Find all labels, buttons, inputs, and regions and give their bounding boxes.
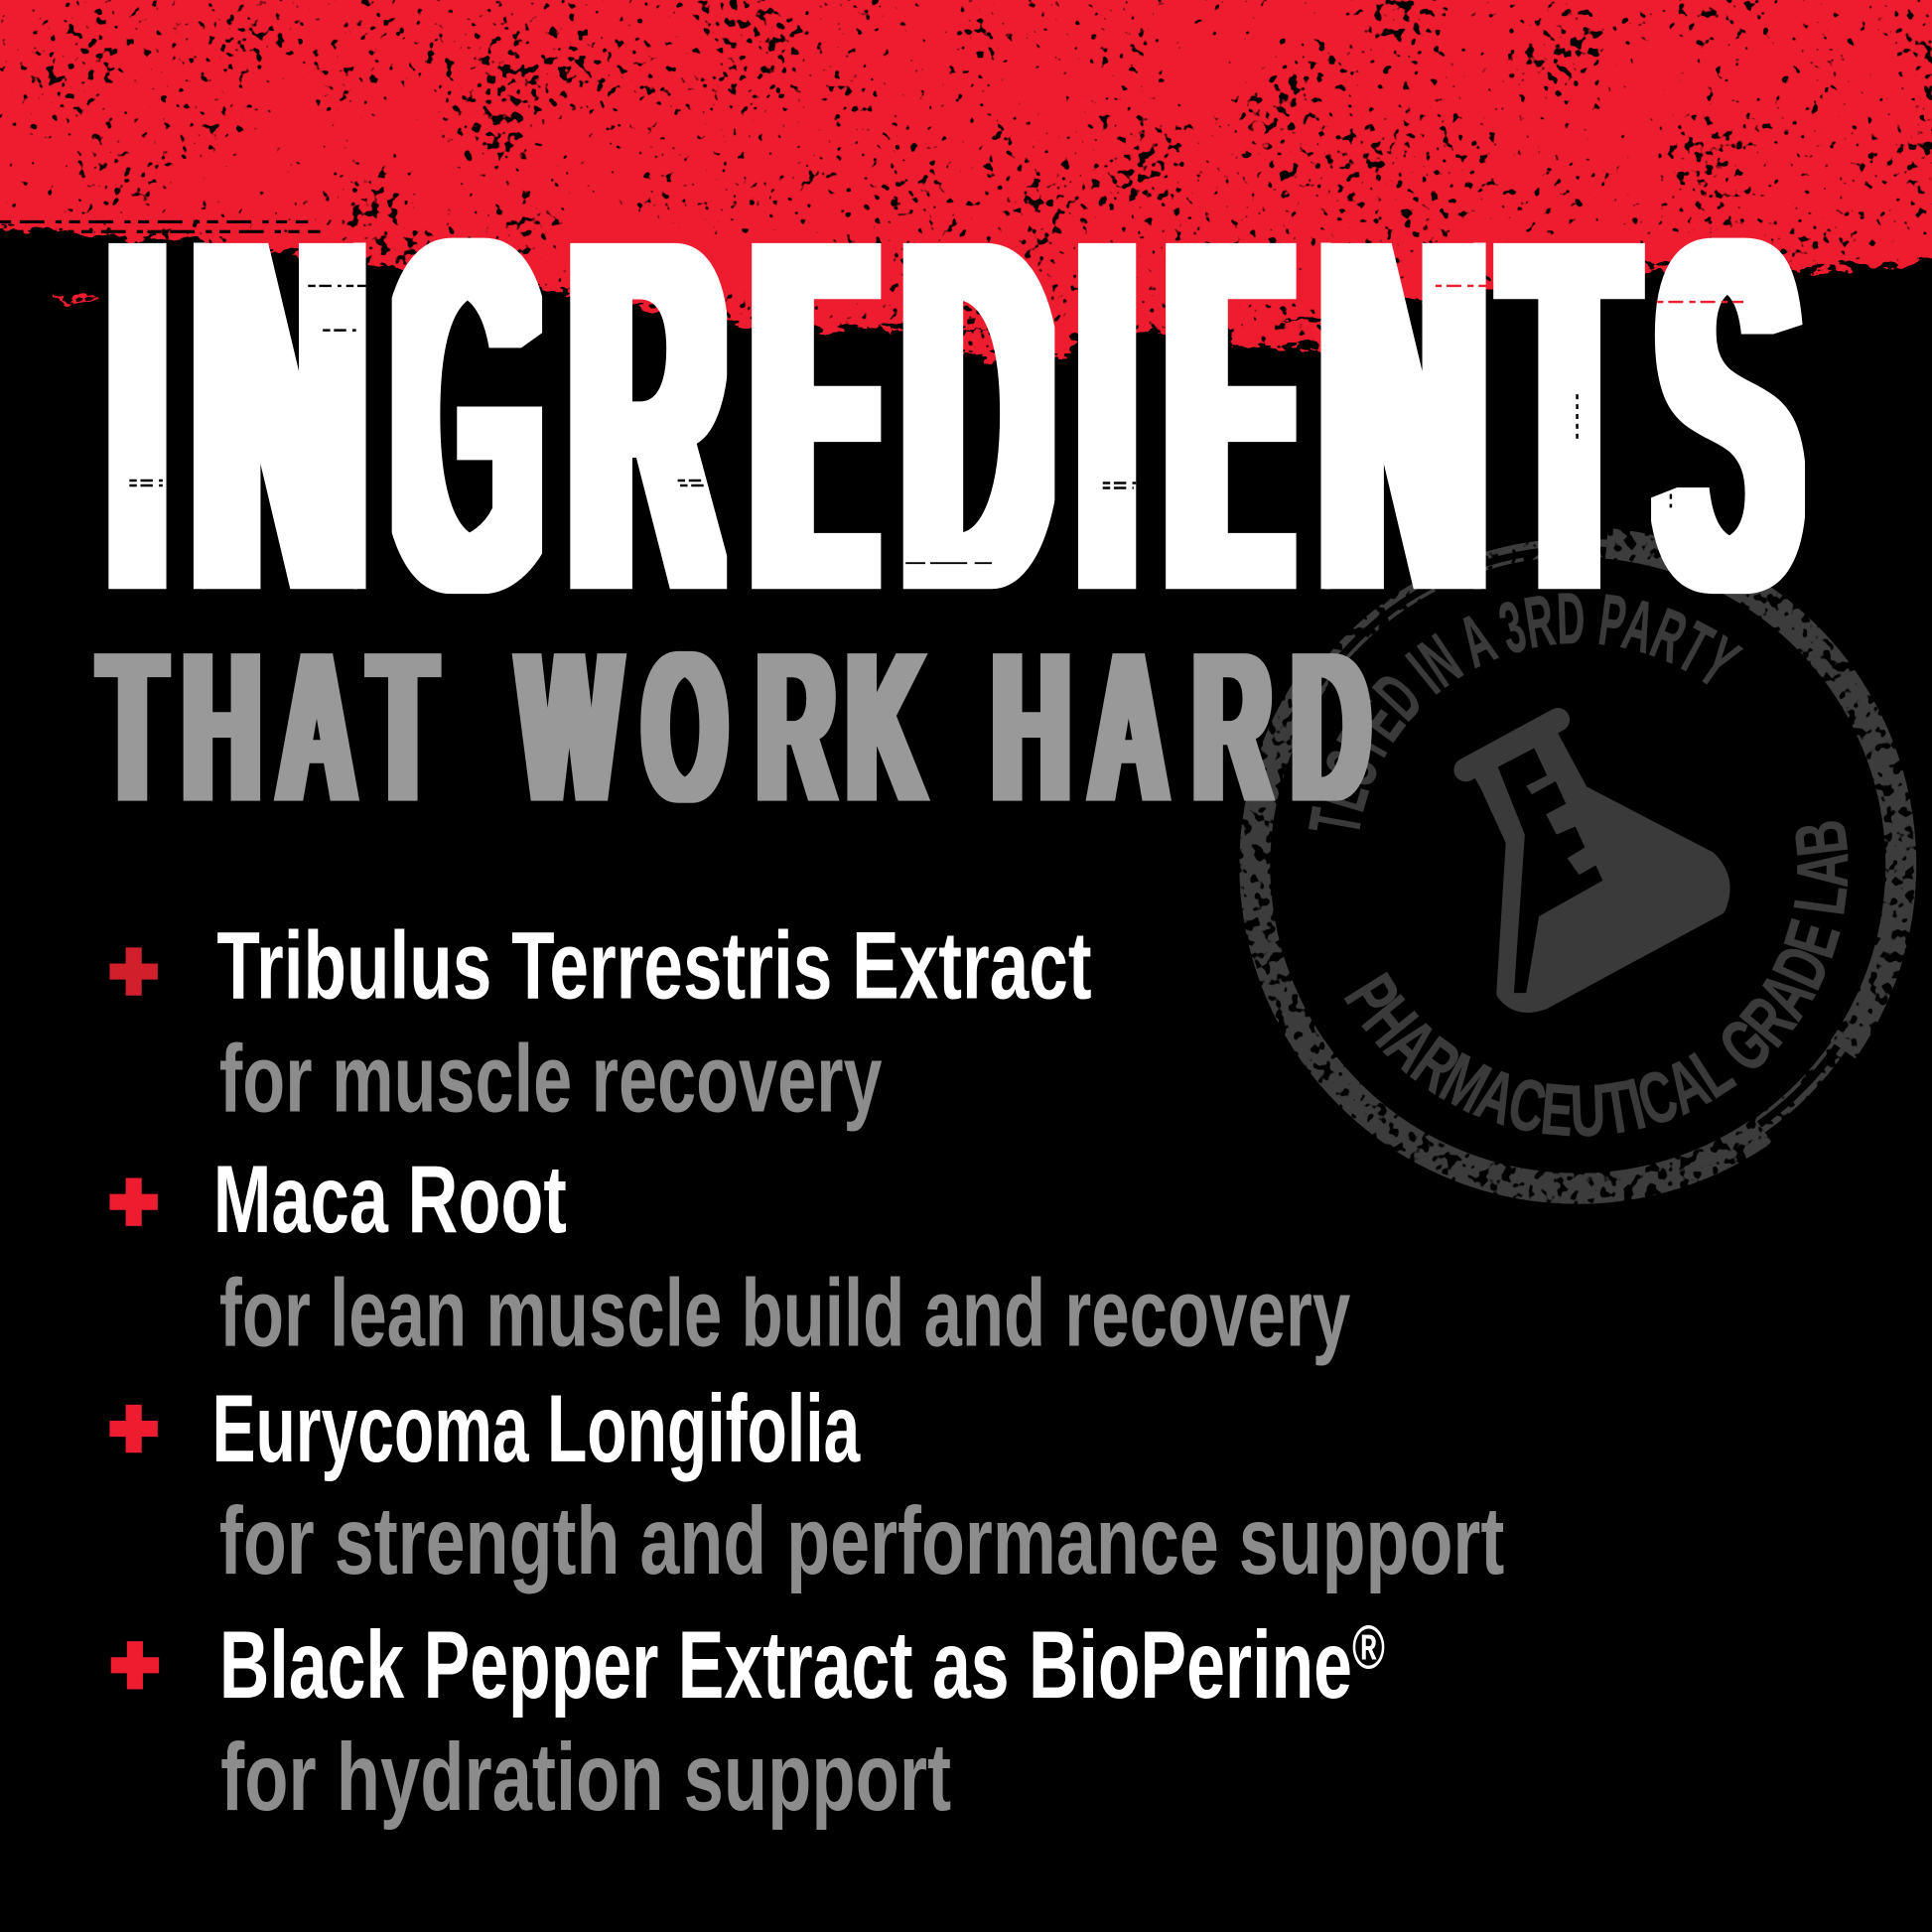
ingredient name: Maca Root	[213, 1145, 567, 1253]
ingredient benefit: for strength and performance support	[219, 1486, 1504, 1594]
icon: red cross	[111, 1641, 159, 1690]
ingredient name: Tribulus Terrestris Extract	[216, 910, 1092, 1019]
icon: red cross	[109, 1177, 158, 1226]
icon: red cross	[109, 947, 158, 996]
stamp text: top arc: TESTED IN A 3RD PARTY	[1309, 593, 1743, 830]
item: Maca Root	[109, 1145, 1350, 1366]
ingredient name: Black Pepper Extract as BioPerine	[219, 1610, 1790, 1719]
ingredient benefit: for muscle recovery	[219, 1024, 883, 1132]
ingredient benefit: for lean muscle build and recovery	[219, 1258, 1350, 1366]
ingredient benefit: for hydration support	[220, 1723, 951, 1831]
stamp text: bottom arc: PHARMACEUTICAL GRADE LAB	[1344, 821, 1849, 1137]
ingredient name: ®	[1352, 1613, 1385, 1682]
title: INGREDIENTS	[108, 238, 1805, 594]
title: INGREDIENTS: INGREDIENTS	[108, 135, 1799, 696]
ingredient list	[109, 910, 1504, 1831]
item: Tribulus Terrestris Extract	[109, 910, 1092, 1132]
stamp ring	[1255, 542, 1901, 1188]
ingredient name: Eurycoma Longifolia	[211, 1374, 861, 1482]
title scratches	[129, 286, 1743, 563]
icon: red cross	[109, 1405, 158, 1452]
item: Eurycoma Longifolia	[109, 1374, 1504, 1594]
icon: flask	[1465, 720, 1723, 1006]
subtitle: THAT WORK HARD: THAT WORK HARD	[100, 608, 1369, 847]
item: Black Pepper Extract as BioPerine	[111, 1610, 1385, 1831]
panel: red grunge banner	[0, 0, 1932, 357]
stamp: tested in a 3rd party pharmaceutical grade lab	[1239, 528, 1916, 1204]
